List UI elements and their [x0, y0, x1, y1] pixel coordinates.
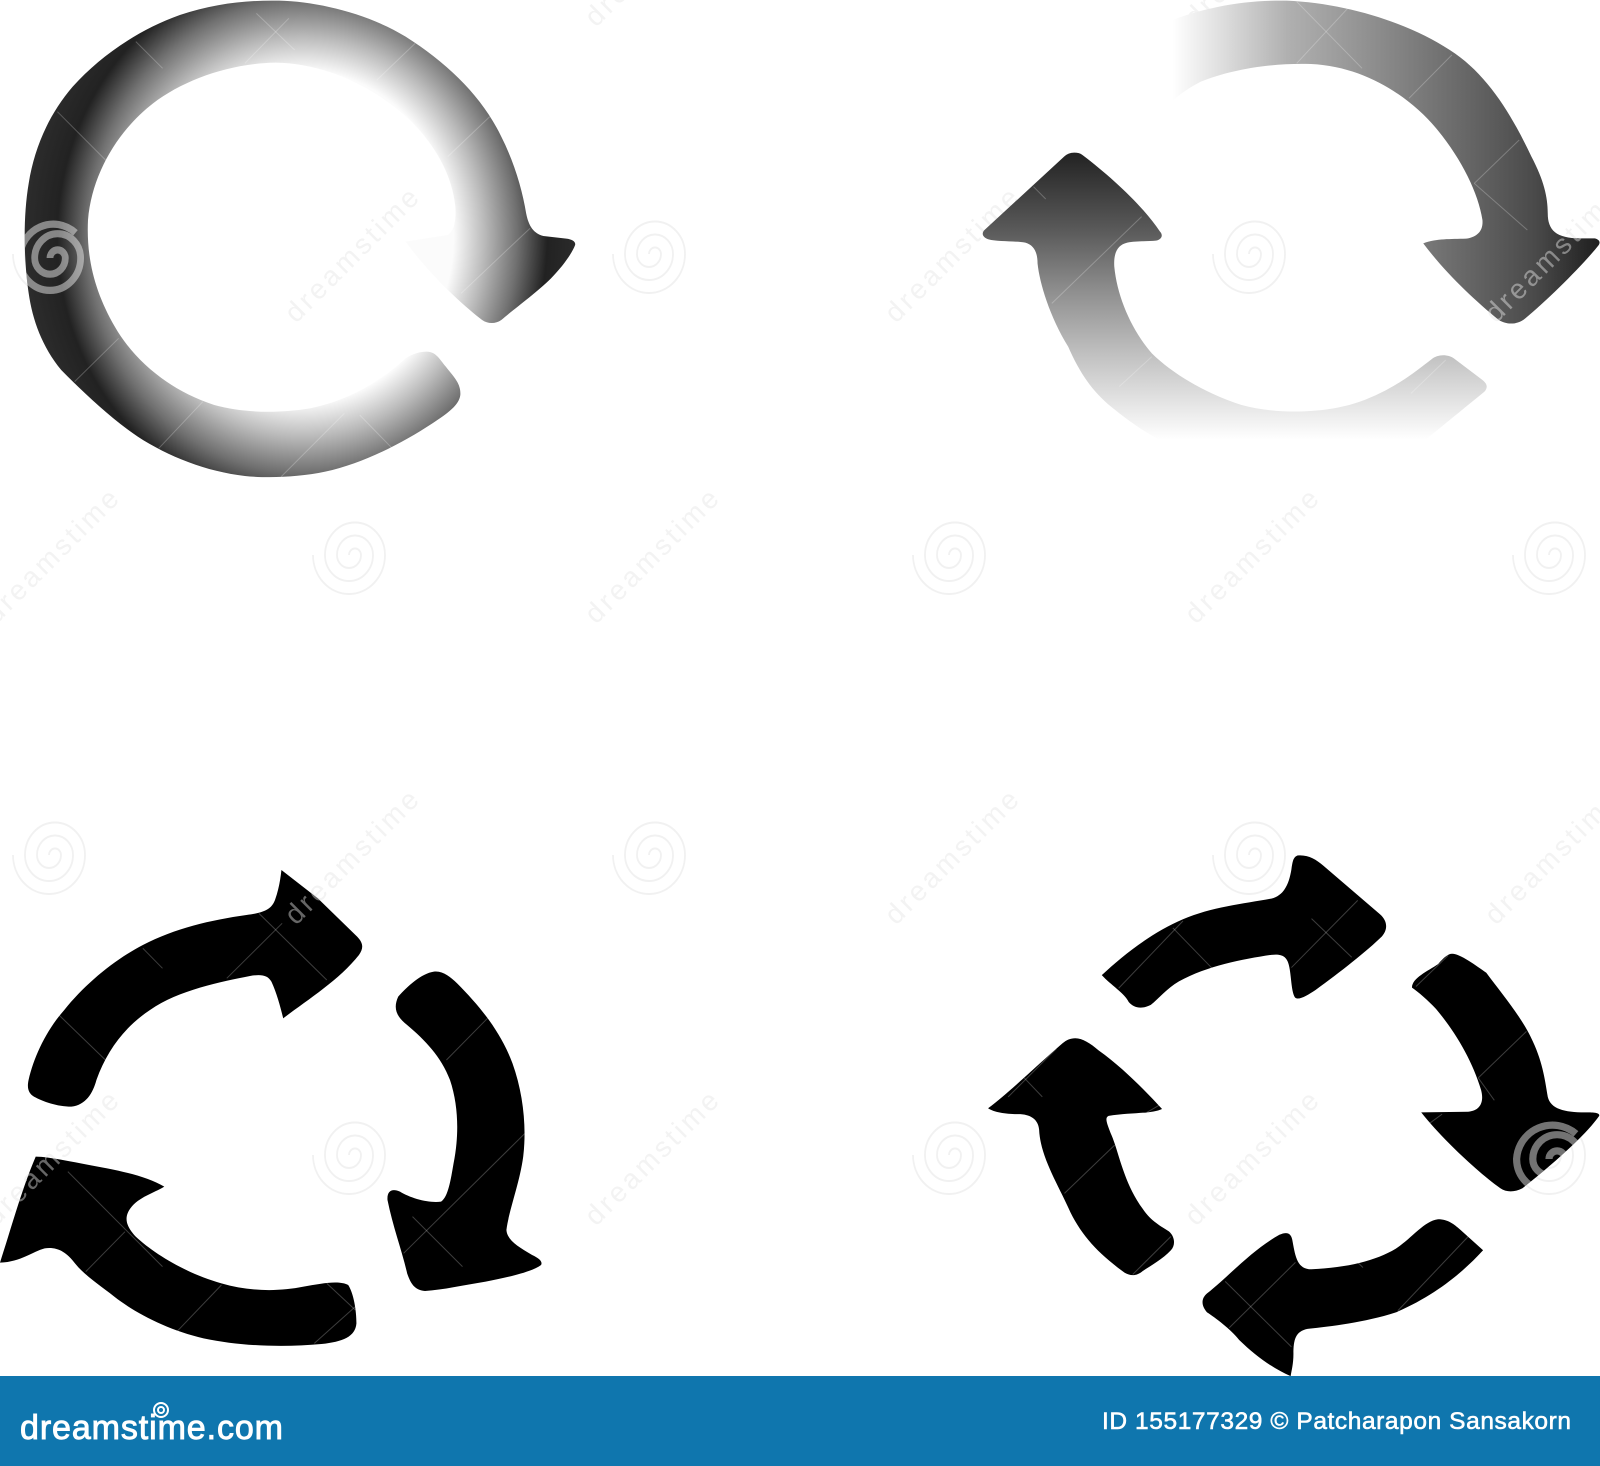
icon: four arrow cycle in black [988, 855, 1599, 1376]
logo spiral [154, 1403, 168, 1417]
arrow: top arrow fading to the left [1164, 1, 1600, 324]
arrow: bottom left [0, 1157, 356, 1346]
watermark: diagonal wordmarks: dreamstime [278, 182, 425, 328]
arrow: right [387, 972, 542, 1291]
image id and credit: ID 155177329 © Patcharapon Sansakorn [1102, 1408, 1571, 1435]
icon: single circular arrow with radial gradient [25, 1, 575, 477]
arrow: upper left [28, 870, 362, 1107]
arrow: left [988, 1038, 1174, 1275]
watermark: diagonal wordmarks: dreamstime [878, 784, 1025, 930]
watermark over arrows [0, 182, 1600, 1231]
arrow: right [1412, 954, 1599, 1191]
watermark: diagonal wordmarks: dreamstime [578, 1085, 725, 1231]
arrow: top [1102, 855, 1386, 1008]
footer logo wordmark: dreamstime.com [20, 1409, 283, 1447]
watermark: spirals [13, 222, 1585, 1194]
watermark over arrows: dreamstime [278, 784, 425, 930]
watermark: diagonal wordmarks: dreamstime [278, 784, 425, 930]
watermark: diagonal wordmarks: dreamstime [1178, 483, 1325, 629]
watermark: diagonal wordmarks: dreamstime [578, 483, 725, 629]
watermark: diagonal wordmarks: dreamstime [878, 182, 1025, 328]
footer band [0, 1376, 1600, 1466]
icon: three arrow cycle in black [0, 870, 542, 1346]
arrow: bottom [1203, 1219, 1483, 1376]
icon: two arrow cycle with linear gradients [983, 1, 1600, 440]
watermark: diagonal wordmarks: dreamstime [1178, 1085, 1325, 1231]
arrow: lower arrow fading downward [983, 153, 1487, 440]
